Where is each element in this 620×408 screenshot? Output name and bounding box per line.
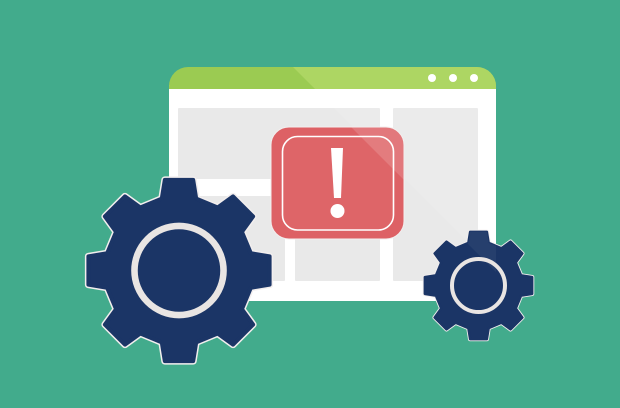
large gear <box>88 180 270 361</box>
window title bar <box>169 67 496 89</box>
alert background <box>271 127 404 239</box>
small gear <box>425 231 532 339</box>
content panels <box>178 108 478 281</box>
illustration: browser window error with gears <box>84 67 534 365</box>
gear ring <box>134 226 224 315</box>
window body <box>169 85 496 301</box>
alert glare <box>351 127 404 180</box>
alert inner frame <box>282 136 394 230</box>
title bar glare <box>293 67 496 89</box>
gear ring <box>452 259 505 312</box>
panel glare <box>315 89 496 270</box>
alert box <box>271 127 404 239</box>
small gear glare <box>468 232 496 272</box>
icon: exclamation mark <box>330 148 344 218</box>
window control dots <box>428 74 478 82</box>
browser window <box>169 67 496 301</box>
